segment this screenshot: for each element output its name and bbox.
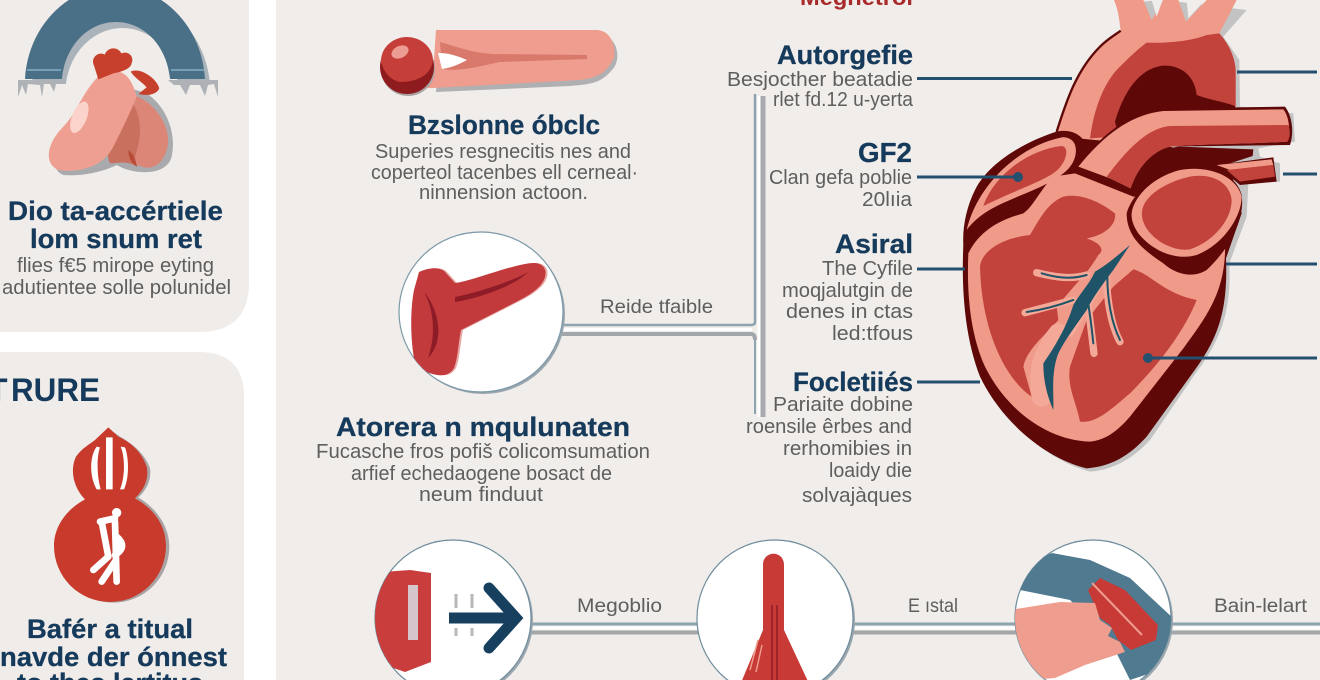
callout: Focletiiés: loaidy die (829, 460, 912, 482)
pulmonary artery (1073, 107, 1292, 197)
heading: capsule block: Bzslonne óbclc (408, 110, 600, 140)
callout: Focletiiés: rerhomibies in (783, 438, 912, 460)
callout: Focletiiés: solvajàques (802, 485, 912, 507)
callout: Asiral: Asiral (835, 229, 913, 259)
icon: circle with arrow (370, 540, 533, 680)
right auricle (1127, 166, 1242, 275)
heart dark silhouette (963, 132, 1242, 468)
callout: Autorgefie: rlet fd.12 u-yerta (773, 89, 914, 111)
icon: circle with red tissue (399, 232, 565, 394)
callout: GF2 (769, 137, 913, 211)
text: tissue block body: neum finduut (419, 484, 543, 506)
callout: Asiral: moqjalutgin de (782, 280, 913, 302)
text: capsule block body (371, 141, 638, 204)
text: tissue block body: Fucasche fros pofiš colicomsumation (316, 441, 650, 463)
callout: GF2: GF2 (858, 137, 912, 168)
callout: Focletiiés (746, 367, 913, 507)
callout: Autorgefie: Autorgefie (777, 40, 913, 70)
callout: Asiral: The Cyfile (822, 258, 913, 280)
label: branch connector: Reide tfaible (600, 297, 713, 318)
coronary vessels (1025, 245, 1130, 410)
icon: capsule and ball (380, 30, 617, 96)
heading: upper card: Dio ta-accértiele (8, 196, 223, 226)
callout: Focletiiés: Pariaite dobine (773, 394, 913, 416)
heading: lower card (0, 614, 227, 680)
text: upper card body: flies f€5 mirope eyting (17, 255, 214, 277)
connector: bottom timeline (528, 624, 1320, 632)
connector: main vertical and branch (562, 94, 763, 417)
text: upper card body: adutientee solle polunidel (2, 277, 231, 299)
callout: GF2: 20lıia (862, 189, 913, 211)
heading: lower card: Bafér a titual (27, 614, 193, 644)
heart shadow (968, 0, 1295, 472)
panel: left upper card (0, 0, 249, 332)
panel: left lower card (0, 352, 244, 680)
text: capsule block body: Superies resgnecitis nes and (375, 141, 631, 163)
text: tissue block body: arfief echedaogene bosact de (351, 463, 612, 485)
heading: lower card: navde der ónnest (0, 642, 227, 672)
pulmonary vein (1217, 157, 1277, 185)
icon: red figure badge (54, 427, 169, 603)
icon: circle with hand and heart (1010, 540, 1175, 680)
label: E ıstal: E ıstal (908, 596, 958, 617)
heading: upper card (8, 196, 223, 254)
label: Bain-lelart: Bain-lelart (1214, 596, 1308, 617)
callout: Asiral (782, 229, 913, 345)
callout: Focletiiés: Focletiiés (793, 367, 913, 397)
aorta (1057, 0, 1237, 143)
ventricle body (968, 173, 1227, 442)
heading: upper card: lom snum ret (30, 224, 202, 254)
heading: tissue block: Atorera n mqulunaten (336, 412, 630, 442)
callout: Asiral: denes in ctas (786, 301, 913, 323)
callout: Focletiiés: roensile êrbes and (746, 416, 912, 438)
text: upper card body (2, 255, 231, 299)
icon: circle with red shape (697, 540, 855, 680)
callout: Autorgefie: Besjocther beatadie (727, 69, 913, 91)
illustration: anatomical heart (963, 0, 1295, 472)
callout: Autorgefie (727, 40, 914, 111)
callout: Asiral: led:tfous (832, 323, 913, 345)
left atrium (963, 131, 1088, 248)
text: capsule block body: ninnension actoon. (419, 182, 588, 204)
leader lines (917, 72, 1317, 382)
icon: small heart (49, 48, 173, 175)
icon: arch over heart (18, 0, 218, 97)
panel: main area (276, 0, 1320, 680)
text: tissue block body (316, 441, 650, 506)
callout: GF2: Clan gefa poblie (769, 167, 912, 189)
text: capsule block body: coperteol tacenbes ell cerneal· (371, 162, 638, 184)
label: Megoblio: Megoblio (577, 596, 662, 617)
heading: section title: RURE (11, 372, 100, 408)
